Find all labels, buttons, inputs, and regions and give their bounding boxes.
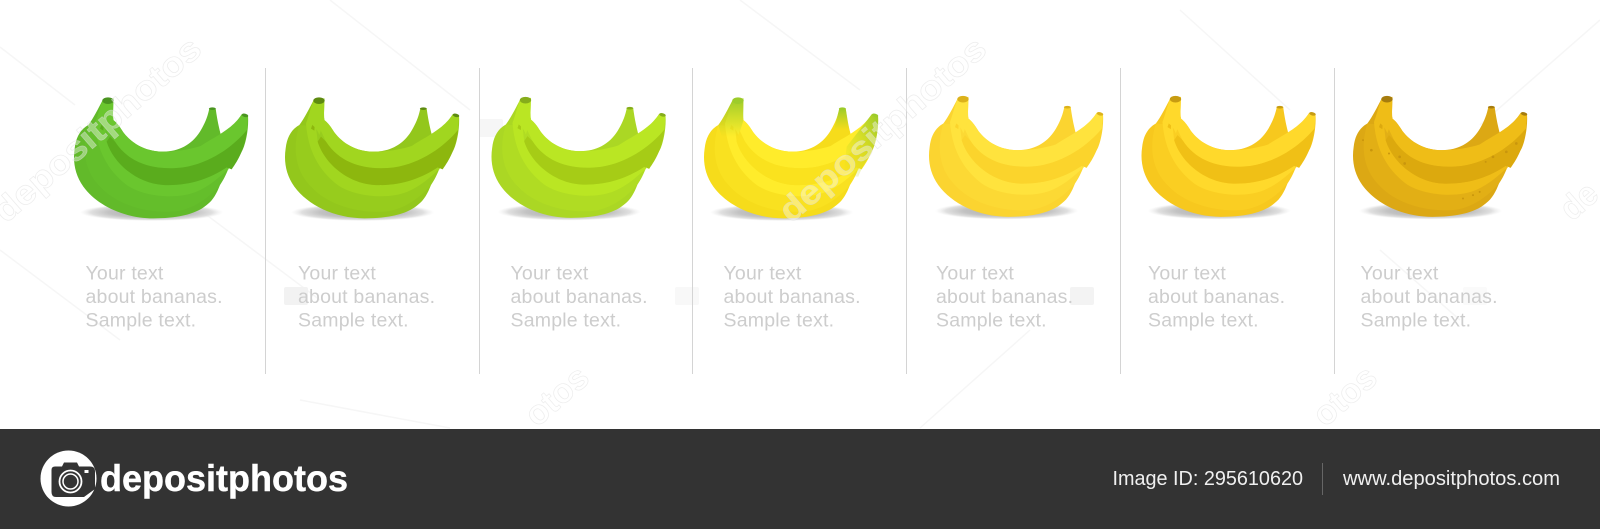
caption: Sample text. [724, 310, 834, 332]
watermark text [0, 29, 1600, 434]
caption: about bananas. [86, 286, 223, 308]
icon: lime green banana bunch [285, 97, 460, 221]
caption: Your text [724, 262, 802, 284]
divider [692, 68, 694, 374]
caption: about bananas. [936, 286, 1073, 308]
caption: Your text [936, 262, 1014, 284]
panel: stage 6 golden yellow banana [1141, 96, 1316, 332]
caption: Your text [1360, 262, 1439, 284]
caption: Sample text. [298, 310, 409, 332]
caption: Your text [86, 262, 164, 284]
icon: ripe spotted banana bunch [1353, 96, 1528, 219]
panel: stage 7 ripe spotted banana [1353, 96, 1528, 332]
caption: Your text [1148, 262, 1226, 284]
caption: Sample text. [510, 310, 621, 332]
icon: yellow banana bunch with green tips [704, 97, 879, 221]
caption: Sample text. [936, 310, 1047, 332]
image id: Image ID: 295610620 [1112, 468, 1303, 490]
separator [1322, 463, 1324, 495]
watermark text: depositphotos [771, 29, 994, 230]
caption: Your text [298, 262, 376, 284]
divider [1334, 68, 1336, 374]
panel: stage 5 bright yellow banana [929, 96, 1104, 332]
caption: about bananas. [298, 286, 435, 308]
logo wordmark: depositphotos [100, 458, 348, 499]
website url: www.depositphotos.com [1342, 468, 1560, 490]
caption: about bananas. [1148, 286, 1285, 308]
icon: green banana bunch [74, 97, 249, 221]
divider [906, 68, 908, 374]
panel: stage 3 yellow-green banana [491, 97, 666, 332]
caption: Your text [510, 262, 589, 284]
footer band [0, 429, 1600, 529]
panel: stage 2 lime green banana [285, 97, 460, 332]
watermark text: otos [517, 358, 597, 434]
icon: bright yellow banana bunch [929, 96, 1104, 219]
panel: stage 1 dark green banana [74, 97, 249, 332]
icon: yellow-green banana bunch [491, 97, 666, 220]
watermark text: otos [1305, 358, 1385, 434]
icon: golden yellow banana bunch [1141, 96, 1316, 219]
caption: Sample text. [1360, 310, 1471, 332]
divider [478, 68, 480, 374]
divider [264, 68, 266, 374]
divider [1120, 68, 1122, 374]
caption: about bananas. [1360, 286, 1498, 308]
caption: about bananas. [510, 286, 648, 308]
caption: Sample text. [86, 310, 196, 332]
icon: depositphotos camera logo [40, 450, 96, 506]
caption: about bananas. [724, 286, 861, 308]
panel: stage 4 yellow banana with green tips [704, 97, 879, 332]
caption: Sample text. [1148, 310, 1259, 332]
